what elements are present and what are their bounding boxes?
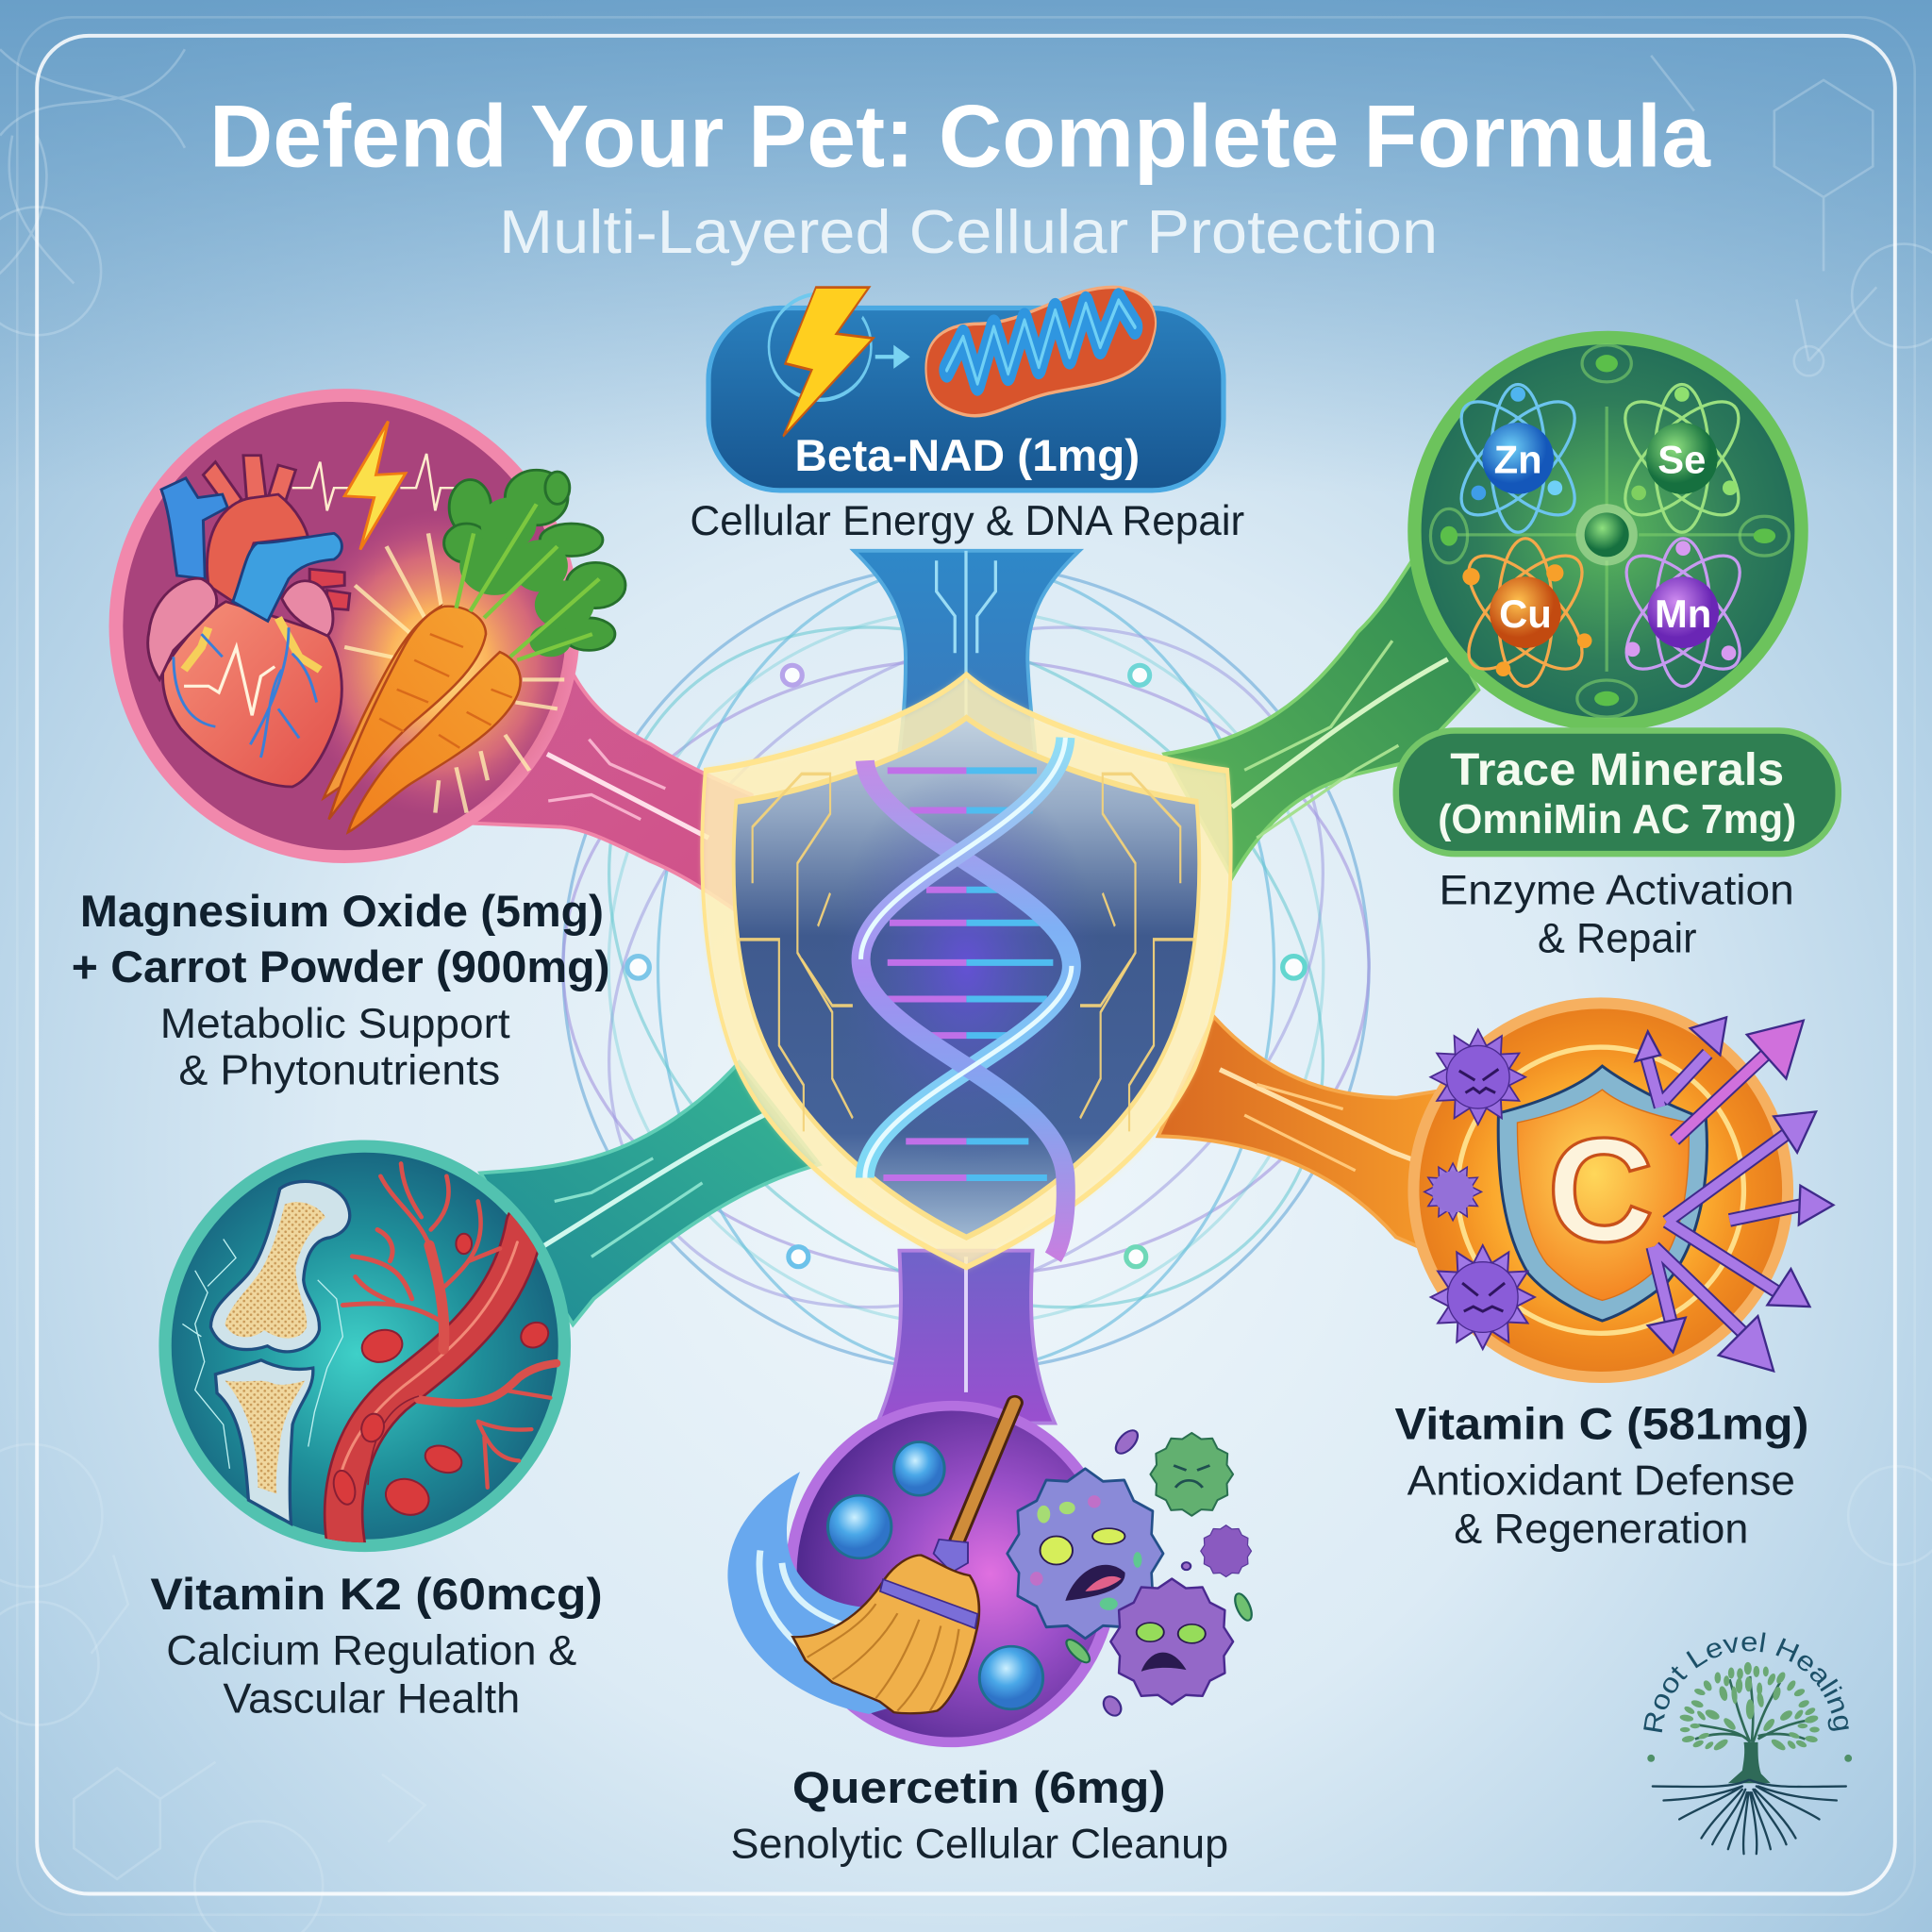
icon: carrots bbox=[324, 607, 521, 832]
panel: trace minerals pill: (OmniMin AC 7mg) bbox=[1438, 797, 1796, 842]
text: Beta-NAD benefit: Cellular Energy & DNA Repair bbox=[690, 498, 1244, 544]
panel: magnesium and carrot circle bbox=[116, 395, 625, 857]
text: vitamin C heading: Vitamin C (581mg) bbox=[1395, 1399, 1808, 1449]
icon: Zn atom: Zn bbox=[1494, 438, 1542, 482]
icon: broom bbox=[792, 1403, 1015, 1713]
icon: carrot leaves bbox=[444, 470, 625, 660]
text: quercetin heading: Quercetin (6mg) bbox=[792, 1762, 1166, 1812]
logo: Root Level Healing: Root Level Healing bbox=[1643, 1632, 1849, 1732]
icon: heart bbox=[148, 456, 350, 787]
text: quercetin benefit: Senolytic Cellular Cleanup bbox=[731, 1822, 1228, 1868]
connector: Trace Minerals green bbox=[1164, 560, 1478, 877]
text: vitamin K2 benefit: Vascular Health bbox=[223, 1676, 520, 1723]
text: Magnesium benefit: Metabolic Support bbox=[160, 1001, 510, 1047]
icon: energy cracks bbox=[182, 1239, 342, 1469]
icon: senescent cells bbox=[1008, 1427, 1255, 1718]
text: vitamin C benefit: Antioxidant Defense bbox=[1407, 1457, 1795, 1504]
text: Magnesium heading: Magnesium Oxide (5mg) bbox=[80, 886, 604, 936]
title: Defend Your Pet: Complete Formula bbox=[209, 86, 1711, 185]
text: vitamin K2 benefit: Calcium Regulation & bbox=[166, 1628, 576, 1674]
icon: viruses bbox=[1424, 1029, 1535, 1349]
text: Magnesium heading bbox=[72, 886, 610, 991]
connector: Magnesium pink bbox=[468, 672, 764, 930]
panel: vitamin K2 circle bbox=[165, 1146, 564, 1545]
text: vitamin C benefit: & Regeneration bbox=[1454, 1506, 1748, 1552]
icon: red blood cells bbox=[330, 1234, 553, 1521]
text: trace minerals benefit: & Repair bbox=[1538, 916, 1697, 962]
panel: trace minerals pill: Trace Minerals bbox=[1450, 744, 1784, 795]
icon: deflected arrows bbox=[1635, 1017, 1833, 1371]
icon: swoosh bbox=[727, 1472, 891, 1714]
icon: Se atom bbox=[1607, 384, 1756, 532]
icon: Cu atom: Cu bbox=[1499, 591, 1552, 636]
icon: Se atom: Se bbox=[1657, 438, 1706, 482]
icon: Mn atom: Mn bbox=[1655, 591, 1711, 636]
icon: Zn atom bbox=[1444, 384, 1592, 532]
connector: Vitamin C orange bbox=[1158, 1017, 1441, 1257]
connector: Vitamin K2 teal bbox=[480, 1062, 820, 1324]
icon: Cu atom bbox=[1451, 539, 1599, 687]
network nodes bbox=[627, 665, 1305, 1267]
text: Magnesium benefit bbox=[160, 1001, 510, 1093]
icon: vitamin C shield bbox=[1498, 1066, 1707, 1321]
decorative cell veins bbox=[1430, 345, 1789, 717]
panel: Beta-NAD pill bbox=[708, 287, 1224, 491]
icon: tree bbox=[1653, 1662, 1846, 1854]
label: Beta-NAD: Beta-NAD (1mg) bbox=[794, 430, 1140, 480]
text: Magnesium benefit: & Phytonutrients bbox=[178, 1047, 500, 1093]
panel: trace minerals circle bbox=[1414, 338, 1802, 724]
shield with DNA bbox=[702, 675, 1231, 1267]
icon: burst rays bbox=[344, 533, 564, 813]
icon: Mn atom bbox=[1609, 539, 1757, 687]
chart: network rings behind shield bbox=[474, 488, 1458, 1447]
text: trace minerals benefit bbox=[1440, 868, 1794, 962]
logo: Root Level Healing bbox=[1643, 1632, 1853, 1855]
connector: Quercetin purple bbox=[877, 1251, 1055, 1424]
icon: ECG and lightning bbox=[292, 422, 463, 550]
subtitle: Multi-Layered Cellular Protection bbox=[499, 197, 1438, 266]
text: trace minerals benefit: Enzyme Activation bbox=[1440, 868, 1794, 914]
panel: vitamin C circle bbox=[1413, 1003, 1833, 1377]
icon: center atom bbox=[1576, 504, 1638, 566]
DNA strands bbox=[861, 738, 1072, 1257]
panel: quercetin circle bbox=[727, 1403, 1255, 1742]
icon: vitamin C shield: C bbox=[1547, 1108, 1654, 1273]
text: Magnesium heading: + Carrot Powder (900mg) bbox=[72, 941, 610, 991]
icon: roots bbox=[1653, 1780, 1846, 1854]
connector: Beta-NAD blue bbox=[854, 551, 1079, 752]
circuit traces bbox=[738, 774, 1194, 1131]
panel: trace minerals pill bbox=[1396, 731, 1839, 854]
DNA rungs bbox=[883, 771, 1053, 1177]
icon: bone bbox=[210, 1181, 350, 1524]
icon: blood vessel bbox=[337, 1163, 557, 1544]
icon: lightning and mitochondrion bbox=[769, 287, 1156, 436]
text: vitamin K2 heading: Vitamin K2 (60mcg) bbox=[150, 1569, 603, 1619]
text: vitamin C benefit bbox=[1407, 1457, 1795, 1552]
text: vitamin K2 benefit bbox=[166, 1628, 576, 1723]
icon: bubbles bbox=[828, 1442, 1043, 1709]
